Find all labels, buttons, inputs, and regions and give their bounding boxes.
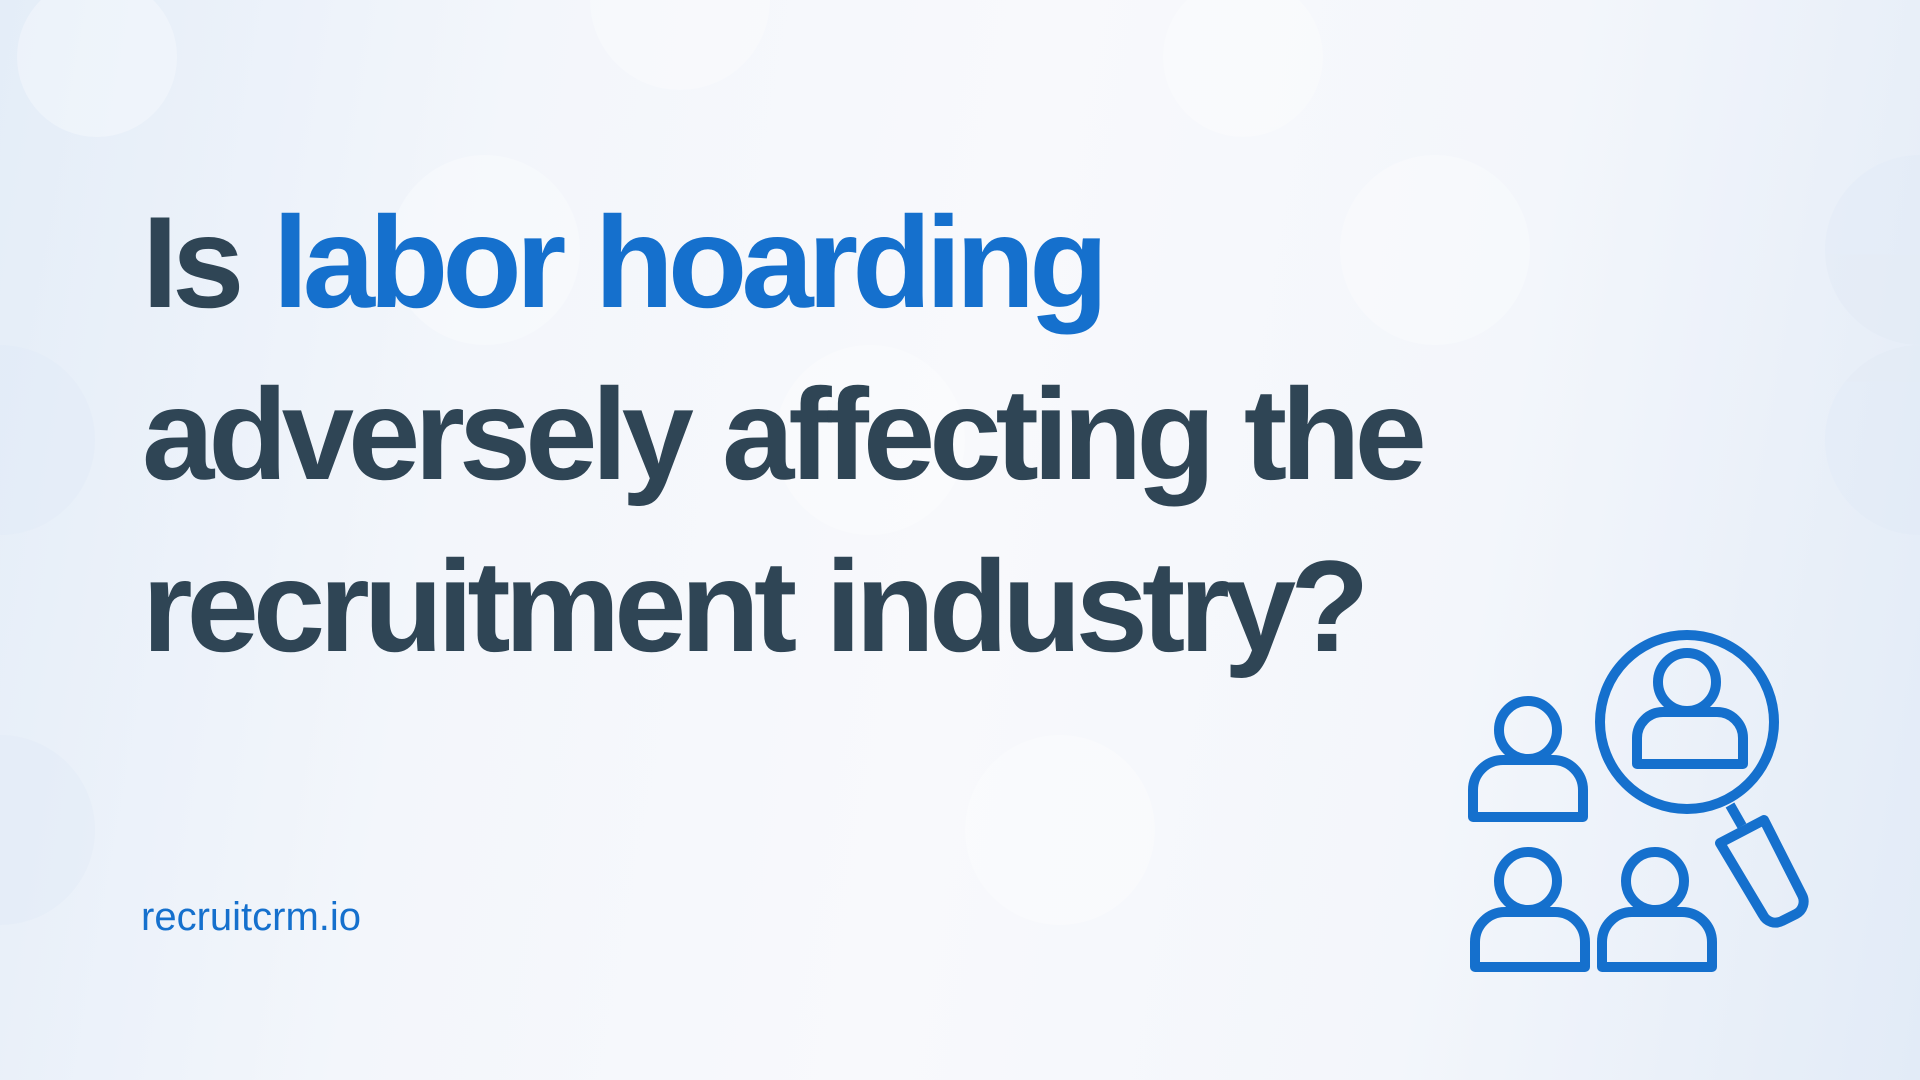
person bottom right <box>1602 852 1712 967</box>
magnifier <box>1600 635 1804 923</box>
person bottom left <box>1475 852 1585 967</box>
title: Is labor hoarding <box>142 189 1103 335</box>
title: recruitment industry? <box>142 533 1364 679</box>
title: adversely affecting the <box>142 361 1421 507</box>
person top left <box>1473 701 1583 817</box>
footer url: recruitcrm.io <box>141 895 361 939</box>
title <box>142 189 1422 679</box>
